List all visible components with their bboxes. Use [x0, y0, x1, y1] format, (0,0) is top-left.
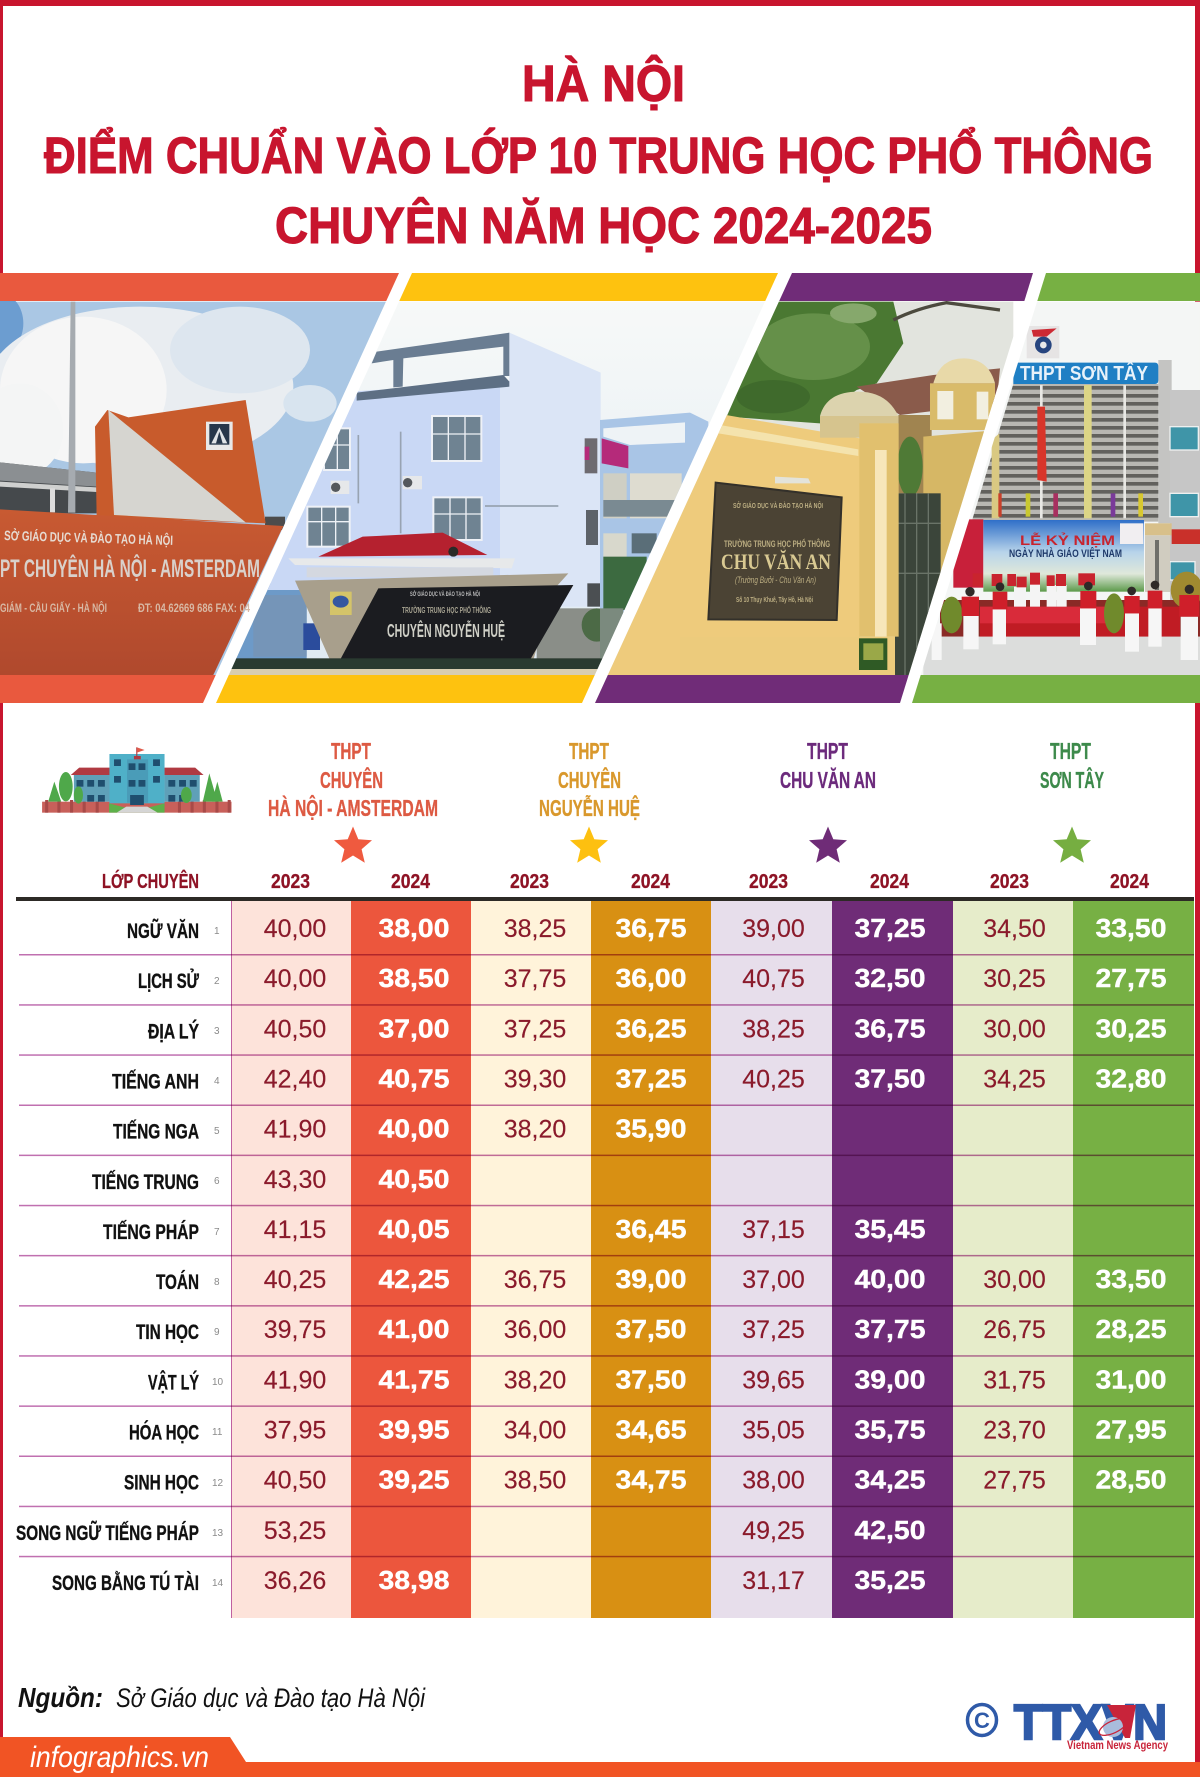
photo sign text: (Trường Bưởi - Chu Văn An): [735, 575, 816, 585]
row 4: Tiếng Anh: 39,30: [504, 1066, 566, 1094]
source note: Nguồn:: [18, 1682, 103, 1713]
school header: Nguyễn Huệ: THPT: [569, 738, 609, 764]
row 13: Song ngữ tiếng Pháp: SONG NGỮ TIẾNG PHÁP: [16, 1521, 199, 1545]
row 8: Toán: 40,25: [264, 1266, 326, 1294]
photo sign text: TRƯỜNG TRUNG HỌC PHỔ THÔNG: [402, 606, 491, 615]
title: [44, 54, 1153, 254]
school header: Hà Nội - Amsterdam: [268, 738, 438, 821]
row 14: Song bằng tú tài: 14: [212, 1578, 224, 1589]
source note: [18, 1682, 426, 1713]
school header: Sơn Tây: SƠN TÂY: [1040, 766, 1104, 793]
row 3: Địa lý: 37,00: [378, 1013, 450, 1043]
icon: star green: [1053, 826, 1091, 863]
row 8: Toán: [156, 1264, 1166, 1294]
row 13: Song ngữ tiếng Pháp: 53,25: [264, 1517, 326, 1545]
row 12: Sinh học: 12: [212, 1478, 224, 1489]
row 11: Hóa học: 35,05: [742, 1416, 805, 1444]
school header: Nguyễn Huệ: NGUYỄN HUỆ: [539, 793, 640, 821]
row 10: Vật lý: 41,90: [264, 1366, 326, 1394]
table column header row: [102, 869, 1150, 893]
row 12: Sinh học: 38,00: [742, 1467, 805, 1495]
icon: star yellow: [570, 826, 608, 863]
row 1: Ngữ văn: 38,00: [378, 913, 450, 943]
row 13: Song ngữ tiếng Pháp: 42,50: [854, 1515, 926, 1545]
school header: Hà Nội - Amsterdam: THPT: [331, 738, 371, 764]
row 3: Địa lý: ĐỊA LÝ: [148, 1019, 199, 1043]
row 2: Lịch sử: 30,25: [983, 965, 1046, 993]
row 10: Vật lý: VẬT LÝ: [148, 1370, 199, 1394]
table column header row: 2023: [510, 871, 549, 893]
row 6: Tiếng Trung: 40,50: [378, 1164, 450, 1194]
row 2: Lịch sử: 37,75: [504, 965, 566, 993]
school header: Chu Văn An: THPT: [807, 738, 848, 764]
row 11: Hóa học: 39,95: [378, 1414, 450, 1444]
row 8: Toán: 36,75: [504, 1266, 566, 1294]
row 8: Toán: TOÁN: [156, 1271, 199, 1294]
photo panel: Sơn Tây: [900, 273, 1200, 703]
row 12: Sinh học: 38,50: [504, 1467, 566, 1495]
row 5: Tiếng Nga: 38,20: [504, 1116, 566, 1144]
photo sign text: ĐT: 04.62669 686 FAX: 04: [138, 601, 250, 615]
photo sign text: TRƯỜNG TRUNG HỌC PHỔ THÔNG: [724, 538, 830, 549]
school header: Sơn Tây: [1040, 738, 1104, 793]
row 6: Tiếng Trung: [92, 1164, 450, 1194]
title: HÀ NỘI: [522, 54, 685, 112]
row 9: Tin học: 41,00: [378, 1314, 450, 1344]
row 5: Tiếng Nga: 5: [214, 1126, 220, 1137]
row 2: Lịch sử: 32,50: [854, 963, 926, 993]
row 10: Vật lý: 39,65: [742, 1366, 805, 1394]
row 11: Hóa học: [129, 1414, 1166, 1444]
row 13: Song ngữ tiếng Pháp: 49,25: [742, 1517, 805, 1545]
school header: Nguyễn Huệ: [539, 738, 640, 821]
table column header row: 2024: [870, 871, 910, 893]
row 13: Song ngữ tiếng Pháp: [16, 1515, 926, 1545]
row 10: Vật lý: 38,20: [504, 1366, 566, 1394]
row 7: Tiếng Pháp: 41,15: [264, 1216, 326, 1244]
row 11: Hóa học: HÓA HỌC: [129, 1420, 199, 1444]
row 8: Toán: 30,00: [983, 1266, 1046, 1294]
photo sign text: SỞ GIÁO DỤC VÀ ĐÀO TẠO HÀ NỘI: [733, 501, 823, 510]
row 3: Địa lý: [148, 1013, 1166, 1043]
row 1: Ngữ văn: 33,50: [1096, 913, 1166, 943]
row 10: Vật lý: [148, 1364, 1166, 1394]
row 14: Song bằng tú tài: 35,25: [854, 1565, 926, 1595]
row 3: Địa lý: 36,25: [616, 1013, 686, 1043]
row 9: Tin học: 36,00: [504, 1316, 566, 1344]
row 9: Tin học: 26,75: [983, 1316, 1046, 1344]
row 11: Hóa học: 35,75: [854, 1414, 926, 1444]
icon: star purple: [809, 826, 847, 863]
row 4: Tiếng Anh: 42,40: [264, 1066, 326, 1094]
photo panel: Hà Nội - Amsterdam: [0, 273, 400, 703]
table column header row: LỚP CHUYÊN: [102, 869, 199, 893]
icon: star orange: [334, 826, 372, 863]
row 4: Tiếng Anh: TIẾNG ANH: [112, 1070, 199, 1094]
table column header row: 2024: [391, 871, 431, 893]
row 11: Hóa học: 23,70: [983, 1416, 1046, 1444]
row 5: Tiếng Nga: 35,90: [616, 1114, 686, 1144]
photo panel: Chu Văn An: [590, 273, 1040, 703]
row 1: Ngữ văn: 37,25: [854, 913, 926, 943]
row 4: Tiếng Anh: 4: [214, 1076, 220, 1087]
row 2: Lịch sử: 2: [214, 976, 220, 987]
row 13: Song ngữ tiếng Pháp: 13: [212, 1528, 224, 1539]
row 7: Tiếng Pháp: 7: [214, 1227, 220, 1238]
row 9: Tin học: [136, 1314, 1166, 1344]
row 4: Tiếng Anh: 37,50: [854, 1064, 926, 1094]
logo: TTXVN: C: [974, 1708, 990, 1733]
row 3: Địa lý: 30,25: [1096, 1013, 1166, 1043]
row 9: Tin học: 28,25: [1096, 1314, 1166, 1344]
row 4: Tiếng Anh: 37,25: [616, 1064, 686, 1094]
footer band: [0, 1737, 1200, 1777]
row 12: Sinh học: [124, 1465, 1166, 1495]
row 10: Vật lý: 31,75: [983, 1366, 1046, 1394]
row 12: Sinh học: 34,25: [854, 1465, 926, 1495]
row 2: Lịch sử: 40,00: [264, 965, 326, 993]
row 3: Địa lý: 30,00: [983, 1015, 1046, 1043]
row 12: Sinh học: 27,75: [983, 1467, 1046, 1495]
photo sign text: PT CHUYÊN HÀ NỘI - AMSTERDAM: [0, 553, 260, 583]
row 8: Toán: 40,00: [854, 1264, 926, 1294]
table column header row: 2023: [749, 871, 788, 893]
icon: school building: [42, 747, 232, 813]
row 11: Hóa học: 11: [212, 1427, 223, 1438]
row 4: Tiếng Anh: 40,25: [742, 1066, 805, 1094]
school header: Chu Văn An: CHU VĂN AN: [780, 766, 876, 793]
table column header row: 2024: [1110, 871, 1150, 893]
row 8: Toán: 37,00: [742, 1266, 805, 1294]
photo panel: Nguyễn Huệ: [200, 273, 800, 703]
row 5: Tiếng Nga: [113, 1114, 686, 1144]
row 11: Hóa học: 34,00: [504, 1416, 566, 1444]
row 8: Toán: 39,00: [616, 1264, 686, 1294]
photo sign text: GIÁM - CẦU GIẤY - HÀ NỘI: [0, 600, 107, 615]
table column header row: 2024: [631, 871, 671, 893]
row 2: Lịch sử: [138, 963, 1166, 993]
row 4: Tiếng Anh: 34,25: [983, 1066, 1046, 1094]
row 2: Lịch sử: 38,50: [378, 963, 450, 993]
photo sign text: NGÀY NHÀ GIÁO VIỆT NAM: [1009, 547, 1122, 560]
row 12: Sinh học: 40,50: [264, 1467, 326, 1495]
school header: Hà Nội - Amsterdam: HÀ NỘI - AMSTERDAM: [268, 794, 438, 821]
photo sign text: CHU VĂN AN: [721, 549, 831, 574]
row 10: Vật lý: 37,50: [616, 1364, 686, 1394]
row 8: Toán: 8: [214, 1277, 220, 1288]
row 11: Hóa học: 34,65: [616, 1414, 686, 1444]
row 10: Vật lý: 10: [212, 1377, 224, 1388]
row 12: Sinh học: SINH HỌC: [124, 1472, 199, 1495]
row 6: Tiếng Trung: 6: [214, 1176, 220, 1187]
row 3: Địa lý: 36,75: [854, 1013, 926, 1043]
row 14: Song bằng tú tài: 36,26: [264, 1567, 326, 1595]
row 10: Vật lý: 39,00: [854, 1364, 926, 1394]
title: CHUYÊN NĂM HỌC 2024-2025: [275, 196, 932, 254]
row 3: Địa lý: 3: [214, 1026, 220, 1037]
row 3: Địa lý: 37,25: [504, 1015, 566, 1043]
row 2: Lịch sử: LỊCH SỬ: [138, 969, 199, 993]
school header: Nguyễn Huệ: CHUYÊN: [558, 766, 621, 793]
row 7: Tiếng Pháp: 36,45: [616, 1214, 686, 1244]
row 14: Song bằng tú tài: [52, 1565, 926, 1595]
row 9: Tin học: 39,75: [264, 1316, 326, 1344]
table column header row: 2023: [271, 871, 310, 893]
row 14: Song bằng tú tài: 38,98: [378, 1565, 450, 1595]
row 5: Tiếng Nga: 41,90: [264, 1116, 326, 1144]
photo sign text: SỞ GIÁO DỤC VÀ ĐÀO TẠO HÀ NỘI: [410, 590, 480, 598]
school header: Chu Văn An: [780, 738, 876, 793]
row 4: Tiếng Anh: [112, 1064, 1166, 1094]
row 6: Tiếng Trung: 43,30: [264, 1166, 326, 1194]
school header: Sơn Tây: THPT: [1050, 738, 1091, 764]
logo: TTXVN: Vietnam News Agency: [1067, 1738, 1168, 1752]
row 12: Sinh học: 34,75: [616, 1465, 686, 1495]
row 4: Tiếng Anh: 32,80: [1096, 1064, 1166, 1094]
photo sign text: Số 10 Thụy Khuê, Tây Hồ, Hà Nội: [736, 595, 813, 604]
row 5: Tiếng Nga: 40,00: [378, 1114, 450, 1144]
photo sign text: LỄ KỶ NIỆM: [1020, 531, 1115, 548]
row 1: Ngữ văn: [127, 913, 1166, 943]
photo sign text: CHUYÊN NGUYỄN HUỆ: [387, 620, 505, 641]
row 1: Ngữ văn: 38,25: [504, 915, 566, 943]
row 11: Hóa học: 37,95: [264, 1416, 326, 1444]
row 7: Tiếng Pháp: TIẾNG PHÁP: [103, 1221, 199, 1244]
photo sign text: SỞ GIÁO DỤC VÀ ĐÀO TẠO HÀ NỘI: [4, 528, 173, 548]
row 12: Sinh học: 39,25: [378, 1465, 450, 1495]
row 1: Ngữ văn: 40,00: [264, 915, 326, 943]
row 9: Tin học: 37,75: [854, 1314, 926, 1344]
row 5: Tiếng Nga: TIẾNG NGA: [113, 1121, 199, 1144]
row 1: Ngữ văn: 36,75: [616, 913, 686, 943]
row 10: Vật lý: 31,00: [1096, 1364, 1166, 1394]
row 8: Toán: 33,50: [1096, 1264, 1166, 1294]
row 3: Địa lý: 40,50: [264, 1015, 326, 1043]
row 1: Ngữ văn: 39,00: [742, 915, 805, 943]
row 2: Lịch sử: 40,75: [742, 965, 805, 993]
row 7: Tiếng Pháp: 37,15: [742, 1216, 805, 1244]
logo: TTXVN: TTXVN: [1014, 1696, 1167, 1750]
row 7: Tiếng Pháp: 35,45: [854, 1214, 926, 1244]
row 6: Tiếng Trung: TIẾNG TRUNG: [92, 1171, 199, 1194]
row 1: Ngữ văn: NGỮ VĂN: [127, 919, 199, 943]
row 3: Địa lý: 38,25: [742, 1015, 805, 1043]
row 14: Song bằng tú tài: SONG BẰNG TÚ TÀI: [52, 1571, 199, 1595]
photo strip: four schools: [0, 273, 1200, 703]
footer band: infographics.vn: [30, 1741, 209, 1774]
table column header row: 2023: [990, 871, 1029, 893]
row 1: Ngữ văn: 34,50: [983, 915, 1046, 943]
photo sign text: [0, 361, 1149, 641]
row 12: Sinh học: 28,50: [1096, 1465, 1166, 1495]
row 9: Tin học: 37,25: [742, 1316, 805, 1344]
row 9: Tin học: 9: [214, 1327, 220, 1338]
row 8: Toán: 42,25: [378, 1264, 450, 1294]
source note: Sở Giáo dục và Đào tạo Hà Nội: [116, 1683, 426, 1713]
row 7: Tiếng Pháp: 40,05: [378, 1214, 450, 1244]
row 9: Tin học: TIN HỌC: [136, 1321, 199, 1344]
row 14: Song bằng tú tài: 31,17: [742, 1567, 805, 1595]
row 9: Tin học: 37,50: [616, 1314, 686, 1344]
row 10: Vật lý: 41,75: [378, 1364, 450, 1394]
row 1: Ngữ văn: 1: [214, 926, 220, 937]
row 2: Lịch sử: 36,00: [616, 963, 686, 993]
school header: Hà Nội - Amsterdam: CHUYÊN: [320, 766, 383, 793]
row 4: Tiếng Anh: 40,75: [378, 1064, 450, 1094]
table column backgrounds: [231, 901, 1194, 1618]
row 7: Tiếng Pháp: [103, 1214, 926, 1244]
row 11: Hóa học: 27,95: [1096, 1414, 1166, 1444]
photo sign text: THPT SƠN TÂY: [1020, 361, 1149, 385]
row 2: Lịch sử: 27,75: [1096, 963, 1166, 993]
